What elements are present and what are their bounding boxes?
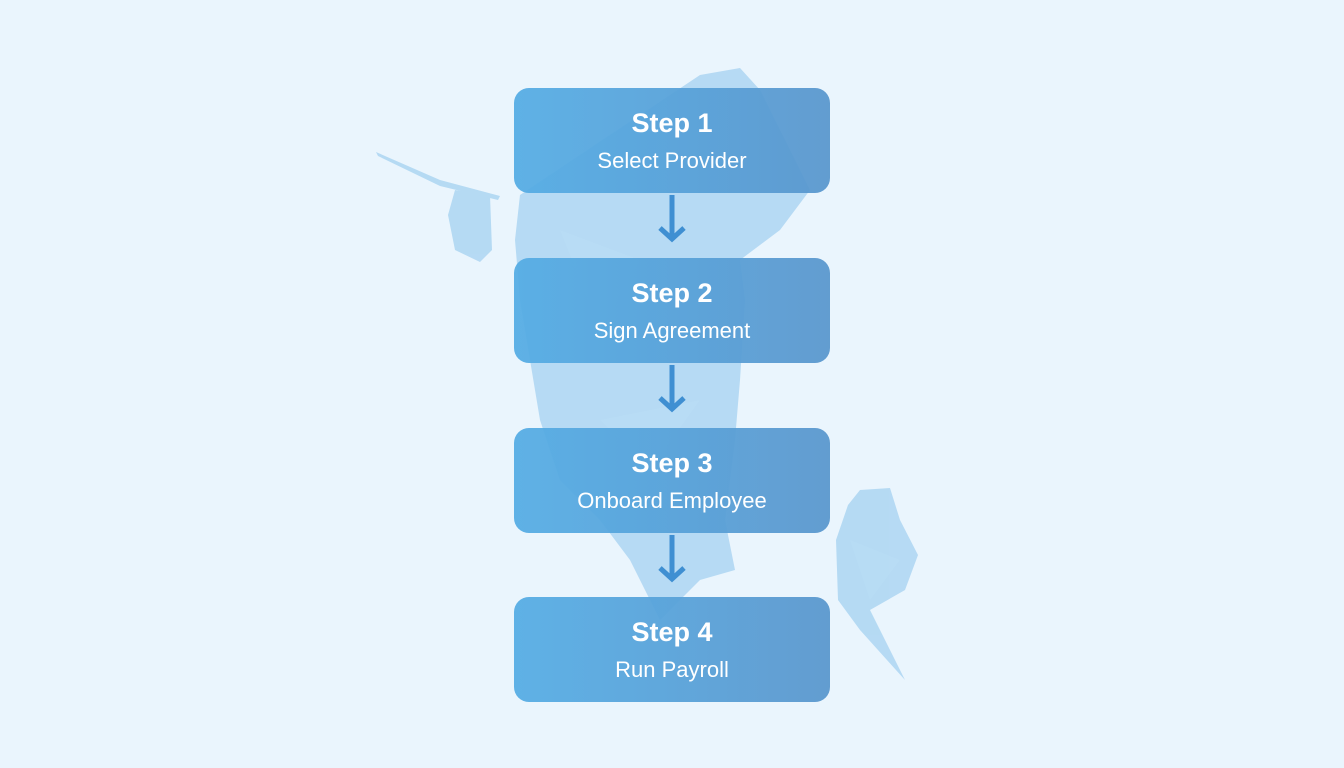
step 3 xyxy=(514,428,830,533)
step 1: Select Provider xyxy=(597,148,747,173)
arrow 1 xyxy=(658,195,686,242)
step 3: Onboard Employee xyxy=(577,488,767,513)
step 1: Step 1 xyxy=(631,108,713,138)
step 4 xyxy=(514,597,830,702)
step 4: Run Payroll xyxy=(615,657,729,682)
step 2: Step 2 xyxy=(631,278,713,308)
step 4: Step 4 xyxy=(631,617,713,647)
arrow 2 xyxy=(658,365,686,412)
arrow 3 xyxy=(658,535,686,582)
step 2 xyxy=(514,258,830,363)
step 3: Step 3 xyxy=(631,448,713,478)
step 2: Sign Agreement xyxy=(594,318,750,343)
step 1 xyxy=(514,88,830,193)
